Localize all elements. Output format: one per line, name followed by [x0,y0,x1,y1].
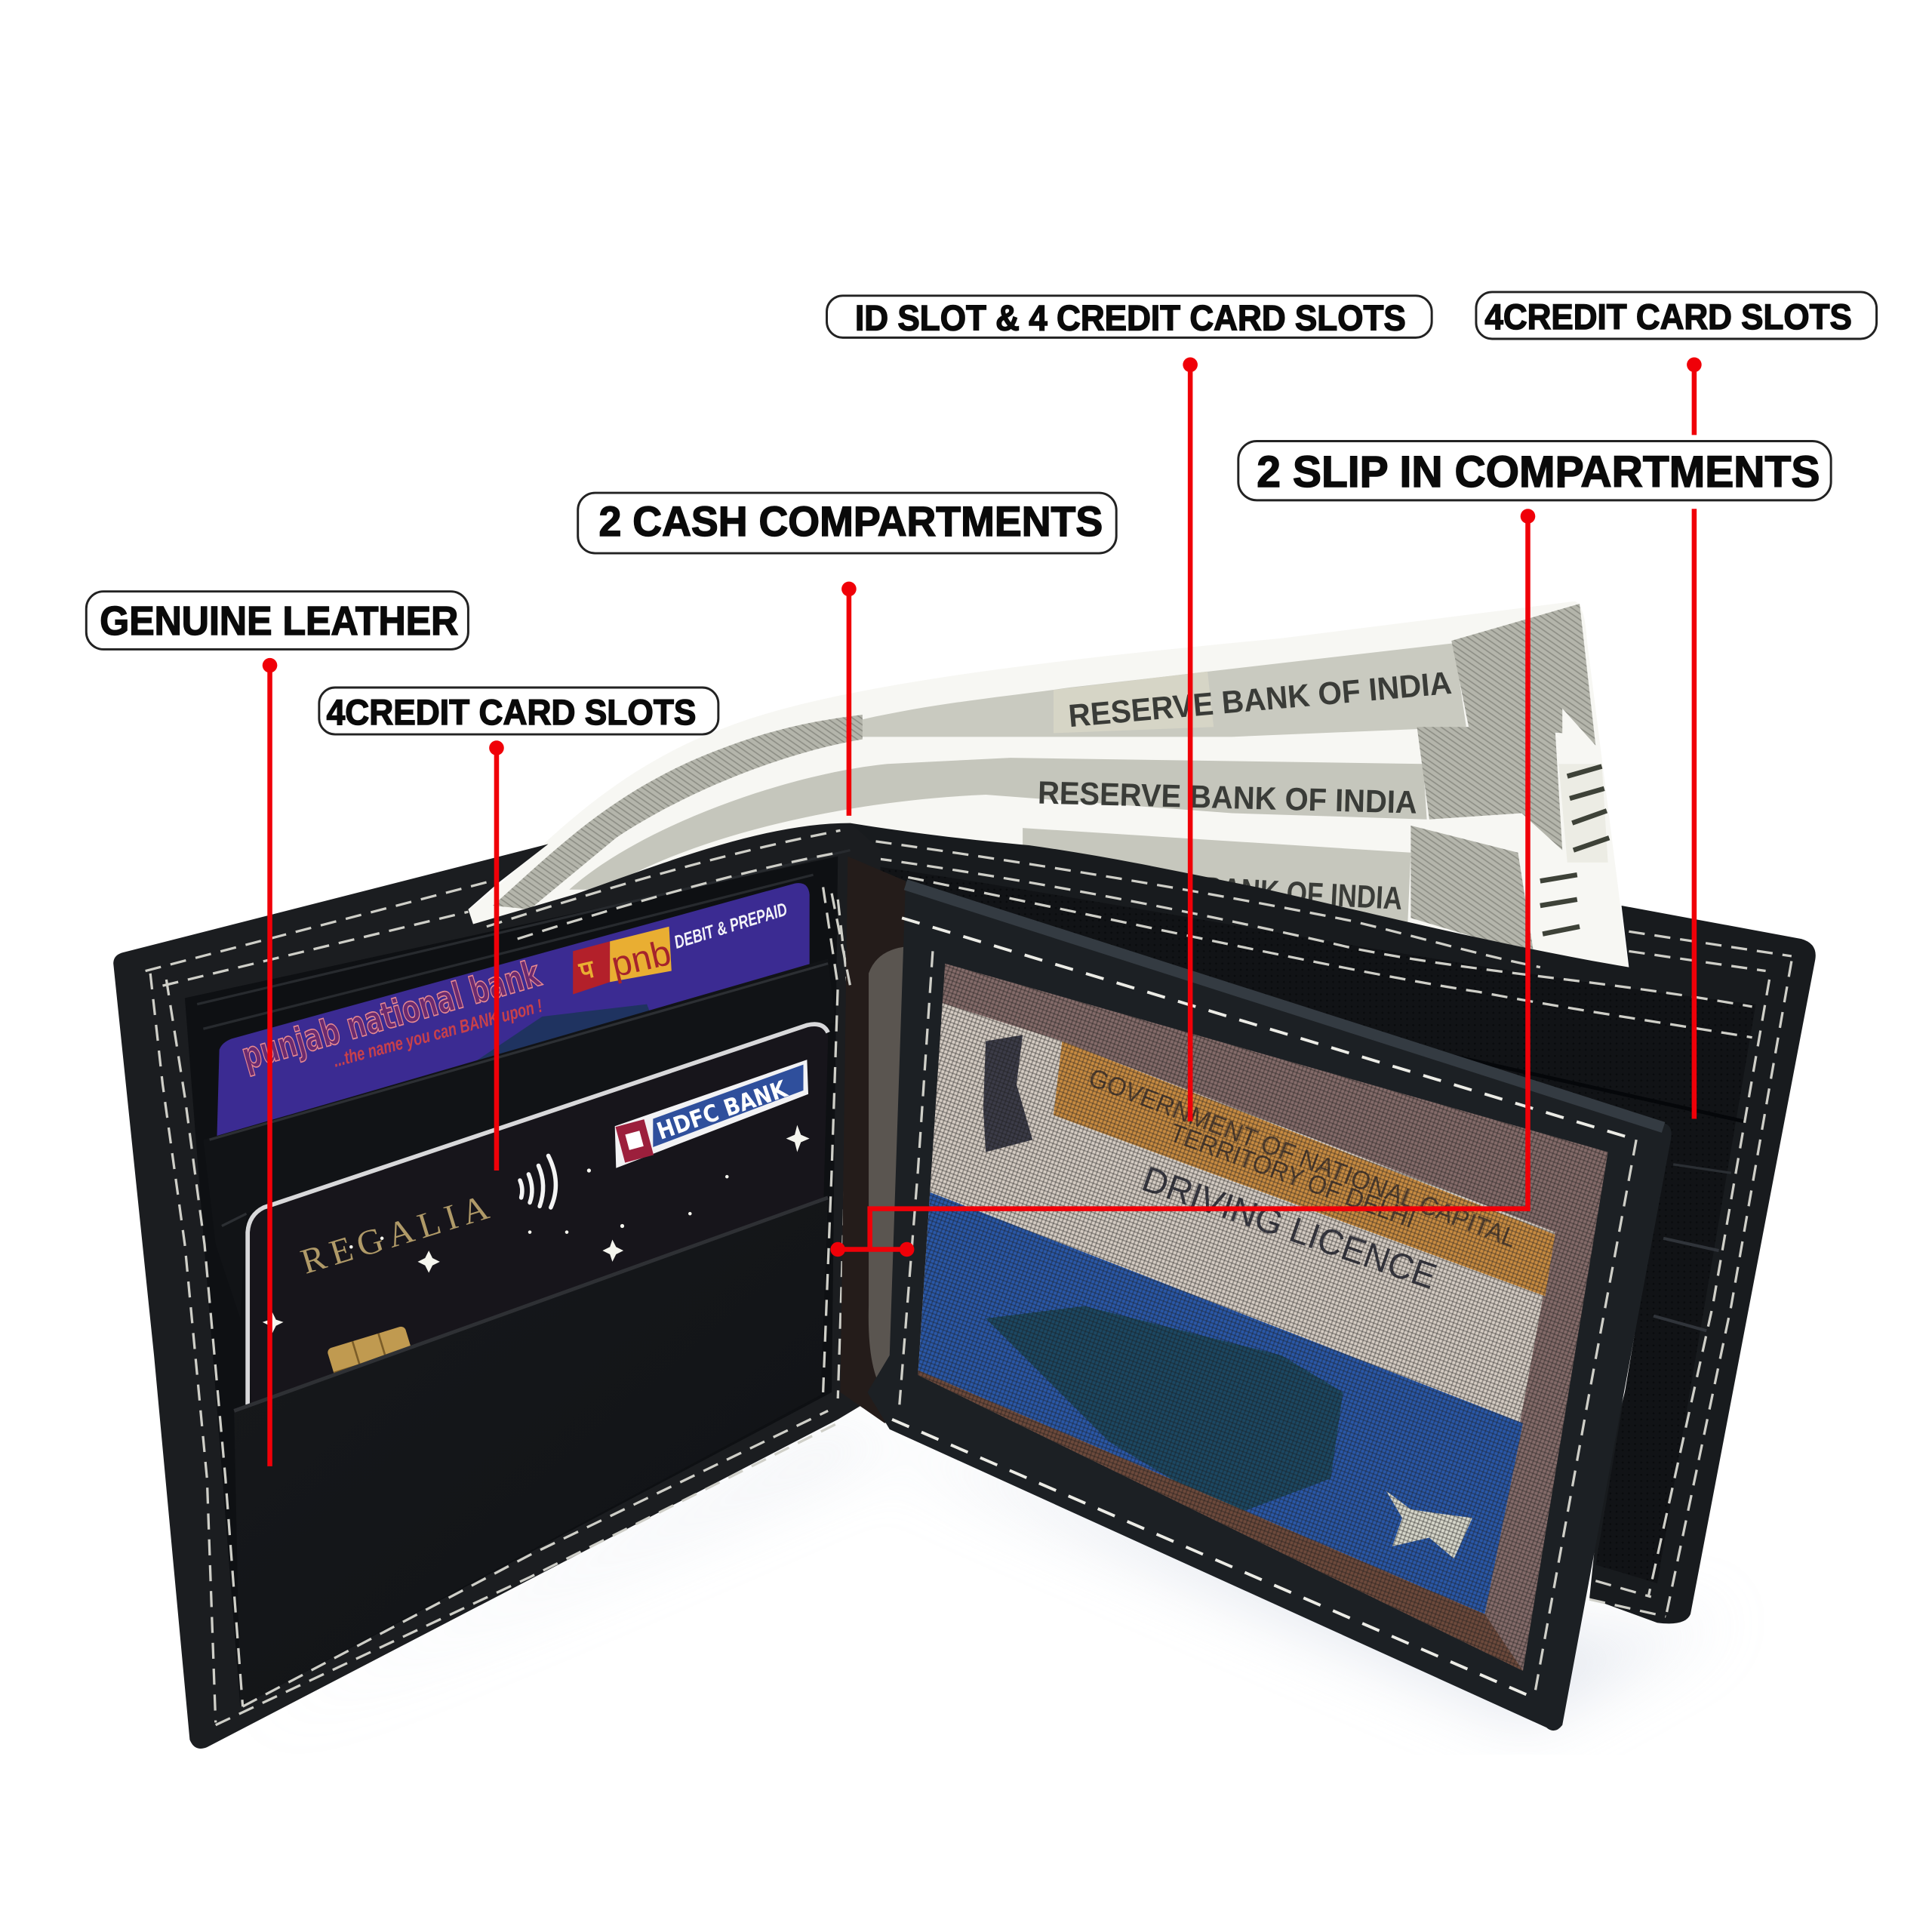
pnb logo: pnb [608,933,675,985]
wallet left panel [113,823,881,1749]
card artwork: bus [475,1004,653,1072]
label: right credit card slots: 4CREDIT CARD SLOTS [1484,297,1852,337]
Regalia wordmark: REGALIA [297,1186,499,1282]
top note print [493,604,1595,909]
emblem [983,1035,1032,1152]
third note text: RESERVE BANK OF INDIA [1069,863,1403,916]
leader: right card slots [1687,357,1702,1118]
HDFC Regalia card [247,1024,828,1417]
label: slip in compartments: 2 SLIP IN COMPARTMENTS [1257,448,1820,497]
callout lines [263,357,1702,1466]
flap upper edge highlight [906,884,1663,1128]
RTO logo [1386,1491,1472,1558]
leader: cash compartments [841,582,857,816]
PNB debit card [217,883,810,1140]
label: genuine leather: GENUINE LEATHER [100,598,458,644]
tagline: ...the name you can BANK upon ! [331,996,545,1072]
spine with inner slip pocket [840,857,909,1423]
leader: genuine leather [263,658,277,1466]
inner lining and slots [851,863,1756,1583]
back stitching [851,838,1792,1617]
mesh ID window [918,964,1608,1671]
mesh overlay [918,964,1608,1671]
wallet back panel [851,823,1816,1623]
leader: ID slot [1183,357,1198,1121]
banknotes [468,601,1629,974]
leader: left card slots [489,740,504,1171]
left stitching [146,830,848,1725]
contactless icon [520,1155,555,1208]
HDFC logo [615,1060,808,1168]
driving licence text: DRIVING LICENCE [1137,1159,1441,1297]
debit label: DEBIT & PREPAID [672,900,789,953]
brown bottom band [918,1371,1523,1671]
label: cash compartments: 2 CASH COMPARTMENTS [598,498,1103,545]
ID flap [832,881,1672,1730]
note paper silhouette [468,601,1629,974]
pnb logo [573,927,675,995]
ID card backdrop [918,1001,1555,1614]
top note text: RESERVE BANK OF INDIA [1067,665,1453,734]
orange band [1054,1041,1555,1297]
label: ID slot and card slots: ID SLOT & 4 CREDIT CARD SLOTS [855,299,1406,339]
floor shadow [247,1429,1725,1725]
left top strips [197,851,851,1029]
leader: slip in compartments [830,509,1535,1257]
HDFC logo: HDFC BANK [654,1075,791,1146]
left interior lining [185,857,838,1706]
bank name: punjab national bank [237,952,546,1078]
second note text: RESERVE BANK OF INDIA [1037,775,1417,820]
blue band [918,1189,1523,1614]
second note print [569,727,1609,890]
front pocket [234,1198,828,1706]
label: left credit card slots: 4CREDIT CARD SLOTS [327,693,696,733]
chip [327,1325,419,1396]
pnb logo: प [576,954,598,985]
licence header text: GOVERNMENT OF NATIONAL CAPITAL [1084,1063,1521,1254]
territory text: TERRITORY OF DELHI [1166,1118,1419,1234]
stars [263,1125,810,1334]
flap stitching [832,894,1636,1698]
upper pocket [203,958,835,1318]
third note print [1023,826,1580,955]
dark photo shadow [986,1306,1343,1515]
